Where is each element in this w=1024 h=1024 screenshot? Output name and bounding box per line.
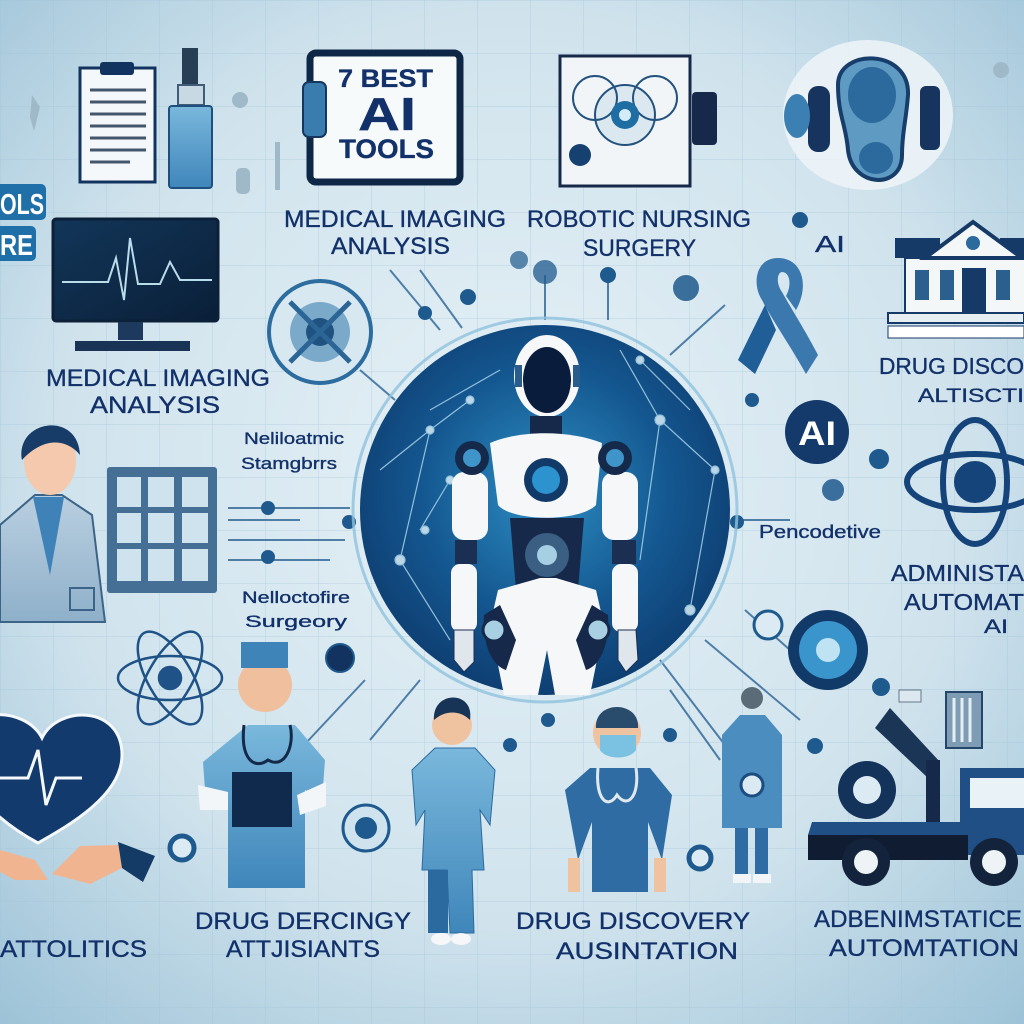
label: surgery garbled: Surgeory <box>245 612 348 631</box>
heading: drug discovery automation <box>516 908 750 965</box>
icon: awareness ribbon <box>738 258 818 374</box>
label: partial title tag: OLS <box>0 189 44 221</box>
label: surgery garbled <box>242 588 350 631</box>
panel: central robot orb <box>353 318 737 702</box>
badge: AI <box>785 400 849 464</box>
icon: atom right <box>907 420 1024 544</box>
heading: medical imaging analysis top: ANALYSIS <box>331 233 450 260</box>
heading: administrative automation right: AI <box>984 617 1008 638</box>
heading: medical imaging analysis top: MEDICAL IMAGING <box>284 206 506 233</box>
icon: filter canister <box>899 690 982 748</box>
panel: 7 best AI tools tablet: 7 BEST <box>338 65 433 93</box>
panel: 7 best AI tools tablet <box>303 53 460 182</box>
badge: AI: AI <box>798 415 836 453</box>
label: garbled surgery left <box>241 429 345 473</box>
robot <box>451 335 638 695</box>
figure: standing person coat <box>722 687 782 883</box>
heading: administrative automation right: AUTOMAT <box>904 589 1024 615</box>
figure: masked nurse <box>565 707 672 892</box>
label: partial title tag <box>0 184 46 262</box>
network lines in orb <box>380 350 719 640</box>
icon: heart with ECG <box>0 715 122 843</box>
icon: hospital building <box>888 222 1024 338</box>
figure: doctor left <box>0 425 105 622</box>
label: garbled surgery left: Neliloatmic <box>244 429 345 448</box>
heading: medical imaging analysis left: MEDICAL IMAGING <box>46 365 270 392</box>
heading: drug discovery automation: AUSINTATION <box>556 938 738 965</box>
icon: monitor with ECG <box>53 219 218 351</box>
icon: atom left <box>118 622 222 734</box>
heading: drug discovery automation: DRUG DISCOVERY <box>516 908 750 935</box>
heading: administrative automation right <box>891 560 1024 638</box>
icon: gear lens circle <box>269 281 371 383</box>
heading: drug discovery right <box>879 353 1024 407</box>
icon: caring hands <box>0 842 155 884</box>
label: predictive: Pencodetive <box>759 522 881 542</box>
label: AI: AI <box>815 231 845 257</box>
figure: person in blue scrubs <box>412 698 495 945</box>
heading: drug dercingy assistants: DRUG DERCINGY <box>195 908 411 935</box>
heading: medical imaging analysis top <box>284 206 506 260</box>
heading: medical imaging analysis left: ANALYSIS <box>90 392 220 419</box>
panel: 7 best AI tools tablet: TOOLS <box>339 134 434 164</box>
heading: administrative automation right: ADMINISTA <box>891 560 1024 586</box>
heading: analytics partial: ATTOLITICS <box>0 936 147 963</box>
label: garbled surgery left: Stamgbrrs <box>241 454 337 473</box>
icon: truck with gear <box>808 708 1024 886</box>
icon: medicine bottle <box>169 48 212 188</box>
heading: robotic nursing surgery: ROBOTIC NURSING <box>527 206 751 233</box>
panel: scan grid <box>107 467 217 593</box>
connector network <box>170 213 889 869</box>
figure: nurse with clipboard <box>198 642 326 888</box>
label: partial title tag: RE <box>0 230 33 262</box>
icon: blue gear lens <box>788 610 868 690</box>
heading: robotic nursing surgery: SURGERY <box>583 235 696 262</box>
panel: 7 best AI tools tablet: AI <box>358 88 416 140</box>
label: surgery garbled: Nelloctofire <box>242 588 350 607</box>
icon: clipboard <box>80 62 155 182</box>
heading: drug discovery right: ALTISCTI <box>918 386 1024 407</box>
icon: small capsule cluster <box>30 62 1009 194</box>
heading: drug dercingy assistants: ATTJISIANTS <box>226 936 380 963</box>
heading: drug discovery right: DRUG DISCO <box>879 353 1024 379</box>
heading: robotic nursing surgery <box>527 206 751 262</box>
icon: scanner headset <box>783 40 953 190</box>
heading: medical imaging analysis left <box>46 365 270 419</box>
heading: administrative automation bottom: AUTOMTATION <box>829 935 1019 962</box>
heading: drug dercingy assistants <box>195 908 411 963</box>
heading: administrative automation bottom <box>814 906 1022 962</box>
icon: imaging document <box>560 56 717 186</box>
heading: administrative automation bottom: ADBENIMSTATICE <box>814 906 1022 933</box>
